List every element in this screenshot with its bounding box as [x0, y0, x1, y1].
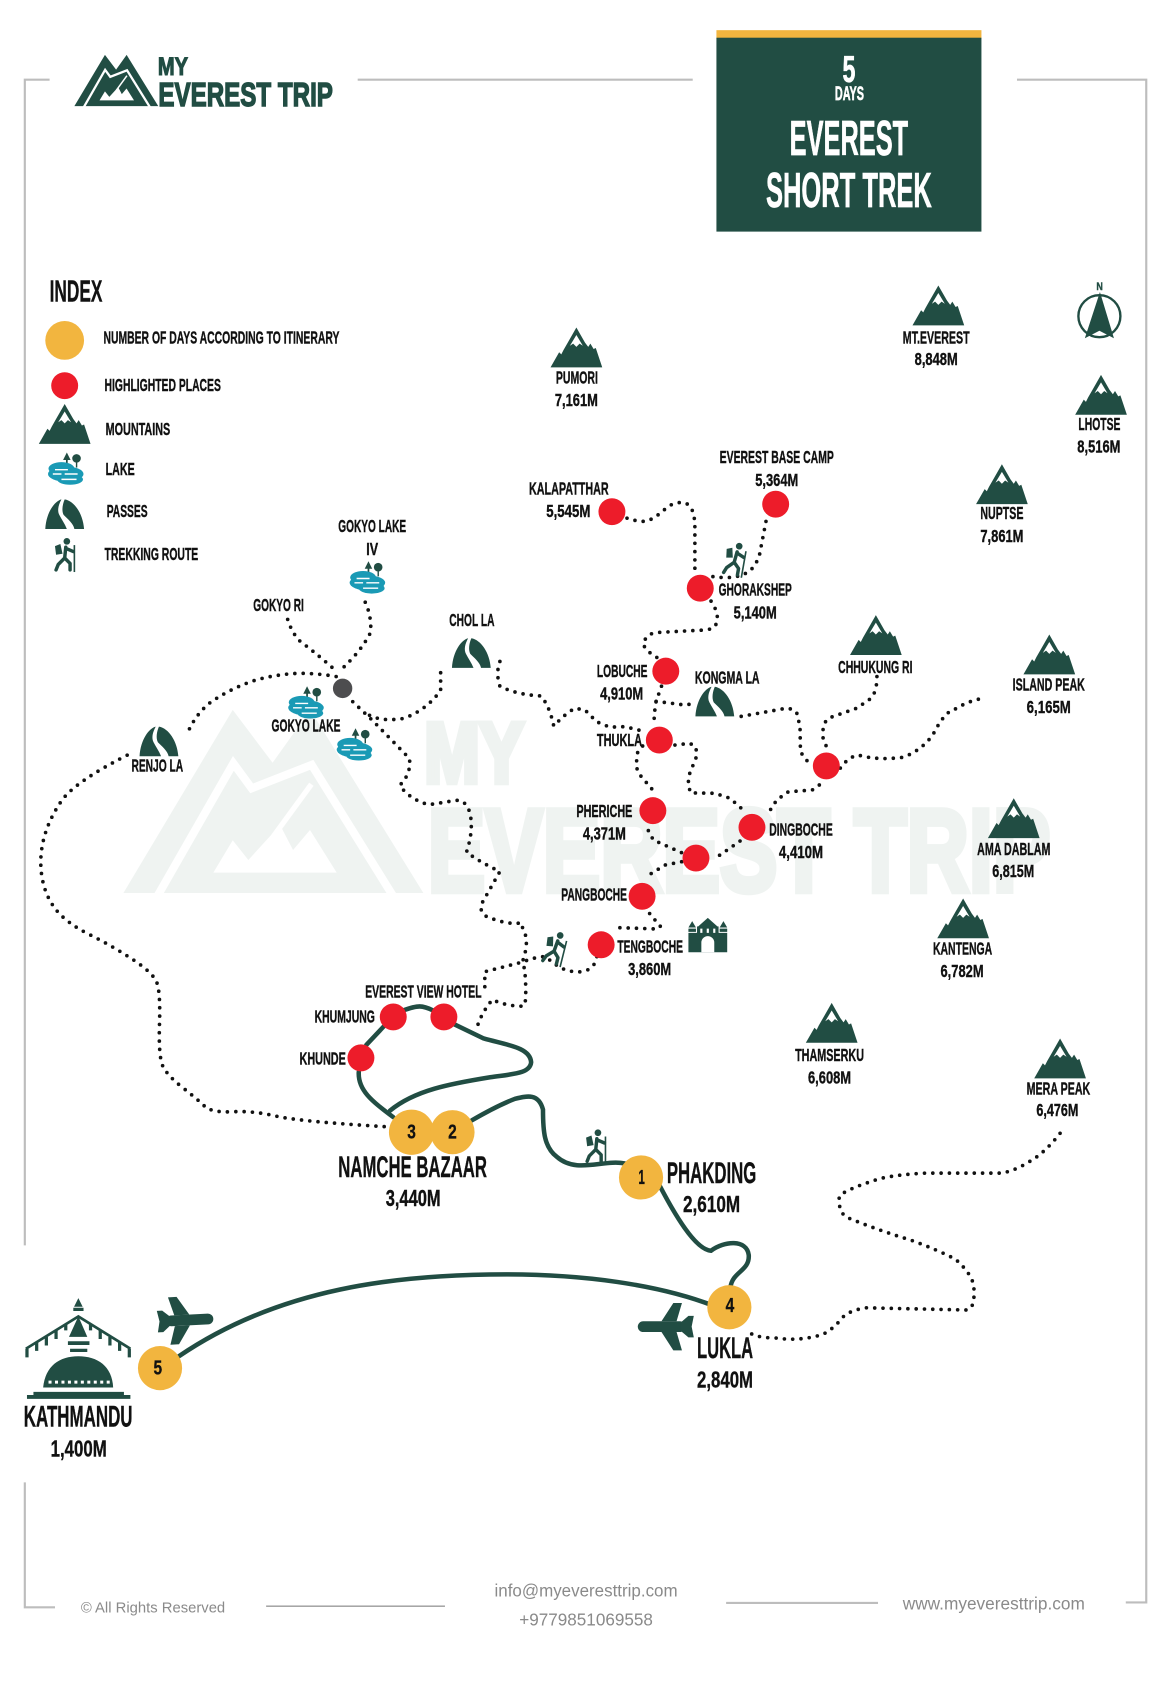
logo: EVEREST TRIP [158, 77, 333, 114]
legend: mountains: MOUNTAINS [106, 419, 170, 439]
icon: compass [1078, 281, 1120, 338]
place labels: 4,910M [600, 684, 643, 704]
legend: lake: LAKE [106, 459, 135, 479]
place labels: GOKYO RI [253, 595, 304, 615]
title text: SHORT TREK [766, 162, 932, 218]
place labels [253, 447, 834, 1068]
mountain: Thamserku: 6,608M [808, 1068, 851, 1088]
legend: days [45, 321, 340, 360]
pass: Chol La: CHOL LA [449, 610, 495, 630]
day 2 circle [430, 1110, 475, 1154]
index heading: INDEX [50, 276, 102, 309]
label: Lukla [697, 1332, 753, 1393]
solid route [179, 1006, 749, 1356]
icon: plane Lukla [638, 1303, 694, 1350]
duration: 5 [842, 49, 855, 90]
legend: passes [45, 499, 148, 529]
title text [766, 110, 932, 218]
pass: Renjo La: RENJO LA [131, 755, 183, 775]
mountain: Pumori [551, 327, 602, 410]
mountain: Island Peak: ISLAND PEAK [1013, 675, 1085, 695]
legend: passes: PASSES [107, 501, 148, 521]
label: Namche Bazaar: 3,440M [386, 1185, 441, 1211]
legend: days: NUMBER OF DAYS ACCORDING TO ITINERARY [103, 328, 340, 348]
icon: hiker near Tengboche [541, 929, 568, 967]
place labels: LOBUCHE [597, 661, 647, 681]
mountain: Island Peak [1013, 635, 1085, 717]
place labels: 5,364M [755, 470, 798, 490]
label: Lukla: LUKLA [697, 1332, 753, 1365]
place labels: EVEREST VIEW HOTEL [365, 982, 482, 1002]
mountain: Pumori: 7,161M [555, 390, 598, 410]
mountain: Lhotse: 8,516M [1077, 436, 1120, 456]
mountain: Island Peak: 6,165M [1027, 697, 1071, 717]
lake: Gokyo Lake [272, 686, 340, 735]
watermark logo [123, 706, 1050, 916]
place labels: TENGBOCHE [617, 936, 683, 956]
mountain: Mera Peak: MERA PEAK [1027, 1079, 1090, 1099]
lake: Gokyo Lake IV: IV [366, 539, 378, 559]
icon: monastery [688, 918, 727, 952]
mountain: Kantenga: 6,782M [940, 961, 984, 981]
place labels: 4,371M [583, 824, 626, 844]
mountain: Kantenga: KANTENGA [933, 938, 992, 958]
duration: DAYS [835, 83, 864, 105]
mountain: Kantenga [933, 898, 992, 981]
icon: compass: N [1096, 281, 1103, 293]
footer: copyright: © All Rights Reserved [81, 1601, 225, 1617]
place labels: KALAPATTHAR [529, 478, 609, 498]
mountain: Thamserku: THAMSERKU [795, 1045, 864, 1065]
footer: website: www.myeveresttrip.com [902, 1593, 1085, 1613]
title panel [716, 30, 981, 232]
place labels: 5,140M [734, 602, 777, 622]
day 1 circle [619, 1155, 663, 1200]
footer: contact: +9779851069558 [519, 1610, 653, 1630]
icon: plane Kathmandu [156, 1295, 215, 1345]
legend: trekking route [55, 538, 198, 572]
mountain: Nuptse [976, 464, 1028, 546]
icon: Kathmandu stupa [26, 1298, 130, 1399]
legend: mountains [39, 404, 170, 444]
watermark logo: MY [424, 706, 524, 800]
day 3 circle: 3 [407, 1121, 416, 1144]
place labels: DINGBOCHE [769, 819, 833, 839]
day 2 circle: 2 [448, 1121, 457, 1144]
panel: index legend [39, 276, 340, 572]
icon: hiker near Phakding [586, 1129, 605, 1163]
mountain: Mera Peak: 6,476M [1036, 1100, 1078, 1120]
place labels: KHUNDE [300, 1048, 346, 1068]
title text: EVEREST [790, 110, 908, 166]
legend: trekking route: TREKKING ROUTE [105, 544, 198, 564]
pass: Chol La [449, 610, 495, 668]
mountain: Ama Dablam: AMA DABLAM [977, 839, 1050, 859]
label: Kathmandu: KATHMANDU [24, 1400, 133, 1433]
label: Phakding [667, 1157, 756, 1217]
label: Phakding: PHAKDING [667, 1157, 756, 1190]
legend: highlighted places: HIGHLIGHTED PLACES [105, 375, 221, 395]
mountain: Pumori: PUMORI [556, 368, 598, 388]
label: Phakding: 2,610M [683, 1191, 740, 1217]
mountain: Lhotse: LHOTSE [1078, 414, 1120, 434]
mountain: Nuptse: NUPTSE [980, 503, 1023, 523]
pass: Renjo La [131, 727, 183, 775]
mountain: Thamserku [795, 1003, 864, 1088]
label: Kathmandu: 1,400M [51, 1435, 107, 1461]
mountain: Ama Dablam: 6,815M [992, 861, 1034, 881]
mountain: Mt. Everest: 8,848M [915, 349, 958, 369]
mountain: Mt. Everest [903, 285, 970, 369]
icon: hiker near Gorakshep [722, 541, 747, 578]
label: Namche Bazaar [338, 1151, 487, 1211]
icon: lake [337, 728, 372, 761]
day 5 circle: 5 [154, 1357, 162, 1380]
dotted trekking routes [41, 502, 1060, 1339]
highlighted places [333, 491, 840, 1071]
place labels: THUKLA [597, 730, 642, 750]
lake: Gokyo Lake: GOKYO LAKE [272, 715, 340, 735]
mountain: Mt. Everest: MT.EVEREST [903, 328, 970, 348]
place labels: GHORAKSHEP [719, 580, 792, 600]
mountain: Nuptse: 7,861M [980, 526, 1023, 546]
lake: Gokyo Lake IV [338, 516, 406, 594]
day 4 circle: 4 [726, 1294, 735, 1317]
day 3 circle [389, 1110, 434, 1155]
day 1 circle: 1 [638, 1166, 645, 1189]
mountain: Mera Peak [1027, 1038, 1090, 1120]
footer: contact [495, 1581, 678, 1630]
place labels: KHUMJUNG [315, 1006, 375, 1026]
pass: Kongma La [695, 667, 760, 716]
logo: MY [158, 54, 188, 81]
day 4 circle [707, 1285, 751, 1329]
day circles [138, 1110, 751, 1390]
place labels: EVEREST BASE CAMP [720, 447, 834, 467]
place labels: 4,410M [779, 842, 823, 862]
place labels: PANGBOCHE [561, 885, 627, 905]
mountain: Chhukung Ri: CHHUKUNG RI [838, 657, 912, 677]
mountain: Ama Dablam [977, 798, 1050, 881]
legend: lake [48, 452, 135, 485]
lake: Gokyo Lake IV: GOKYO LAKE [338, 516, 406, 536]
pass: Kongma La: KONGMA LA [695, 667, 760, 687]
label: Kathmandu [24, 1400, 133, 1461]
place labels: 3,860M [628, 959, 671, 979]
logo [74, 54, 333, 114]
place labels: 5,545M [546, 501, 590, 521]
label: Lukla: 2,840M [697, 1367, 753, 1393]
legend: highlighted places [51, 372, 221, 399]
duration [835, 49, 864, 105]
footer: contact: info@myeveresttrip.com [495, 1581, 678, 1601]
label: Namche Bazaar: NAMCHE BAZAAR [338, 1151, 487, 1184]
day 5 circle [138, 1346, 182, 1390]
mountain: Lhotse [1075, 375, 1127, 456]
mountain: Chhukung Ri [838, 615, 912, 677]
place labels: PHERICHE [576, 801, 632, 821]
